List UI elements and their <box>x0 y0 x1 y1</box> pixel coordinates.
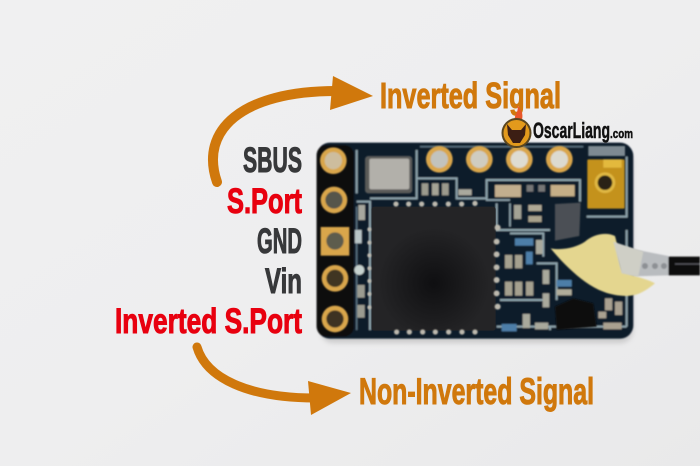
arrow: to non-inverted signal <box>197 347 351 415</box>
icon: logo flame and devil badge <box>502 105 530 147</box>
logo wordmark: OscarLiang <box>533 118 610 143</box>
antenna connector <box>587 146 625 209</box>
logo: OscarLiang.com <box>502 105 633 147</box>
antenna wire <box>620 247 700 277</box>
black residue <box>555 298 597 330</box>
grey residue patch <box>555 203 581 241</box>
photo: receiver board <box>317 143 700 343</box>
label: SBUS: SBUS <box>243 141 302 180</box>
crystal component <box>365 156 412 193</box>
label: S.Port: S.Port <box>227 182 302 221</box>
label: Vin: Vin <box>265 262 302 301</box>
arrow: to inverted signal <box>213 76 373 182</box>
hot glue blob <box>551 234 655 296</box>
main chip <box>367 201 501 335</box>
pads: through-holes <box>320 146 573 332</box>
label: Inverted S.Port: Inverted S.Port <box>115 302 302 341</box>
label: GND: GND <box>257 222 302 261</box>
label: Non-Inverted Signal: Non-Inverted Signal <box>359 371 594 412</box>
label: Inverted Signal: Inverted Signal <box>380 75 561 116</box>
logo wordmark: .com <box>610 126 633 141</box>
